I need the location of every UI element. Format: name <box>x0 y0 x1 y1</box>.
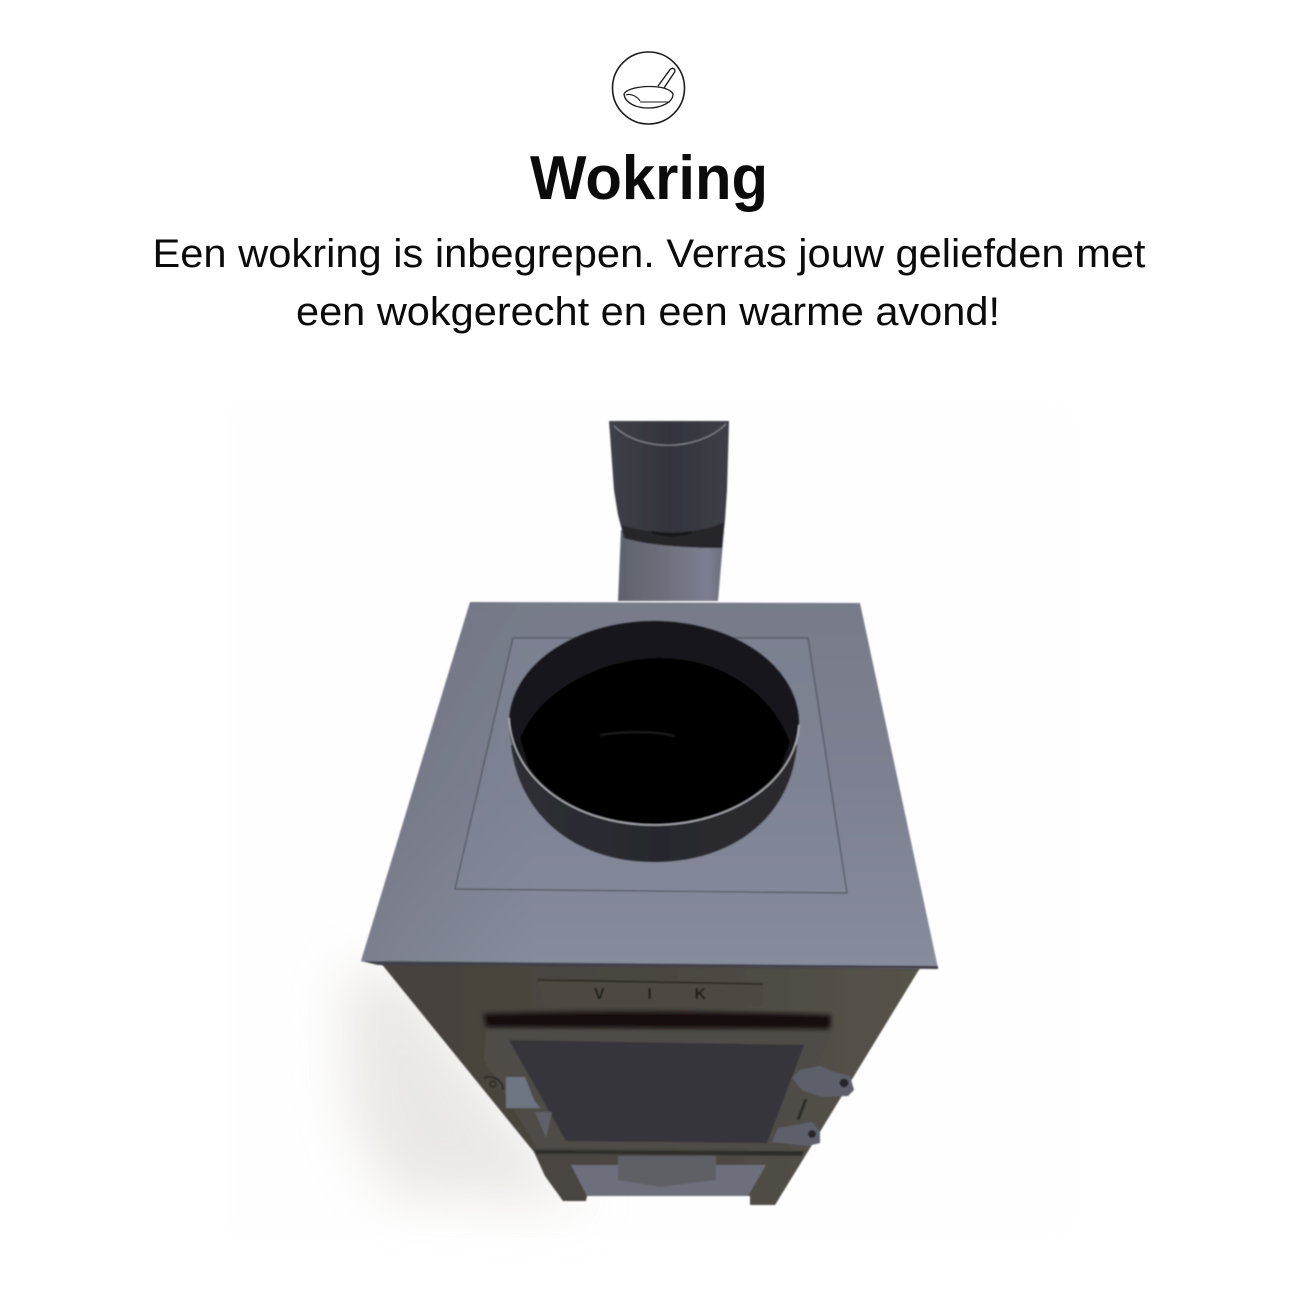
ring rim <box>509 718 799 825</box>
name plate <box>538 980 763 1008</box>
title: Wokring <box>530 144 768 213</box>
ring inner wall <box>509 621 799 825</box>
ring inner floor <box>520 658 790 824</box>
lower compartment <box>571 1165 766 1196</box>
latch <box>484 1077 552 1138</box>
stove photo illustration <box>345 421 938 1205</box>
chimney pipe <box>609 421 729 601</box>
name plate: V I K <box>594 986 706 1003</box>
hinges <box>772 1066 854 1146</box>
wok ring <box>509 621 799 862</box>
description text: Een wokring is inbegrepen. Verras jouw geliefden met <box>152 232 1146 276</box>
icon: wok pan in circle <box>612 52 684 124</box>
ring band <box>511 745 797 862</box>
soft floor shadow <box>345 965 600 1205</box>
description text <box>152 232 1146 334</box>
description text: een wokgerecht en een warme avond! <box>296 290 1000 334</box>
top plate <box>361 602 938 969</box>
door frame <box>484 1028 832 1148</box>
photo background <box>225 400 1075 1240</box>
door top shadow <box>484 1012 831 1029</box>
door window <box>509 1040 804 1143</box>
stove body and legs <box>380 962 920 1205</box>
